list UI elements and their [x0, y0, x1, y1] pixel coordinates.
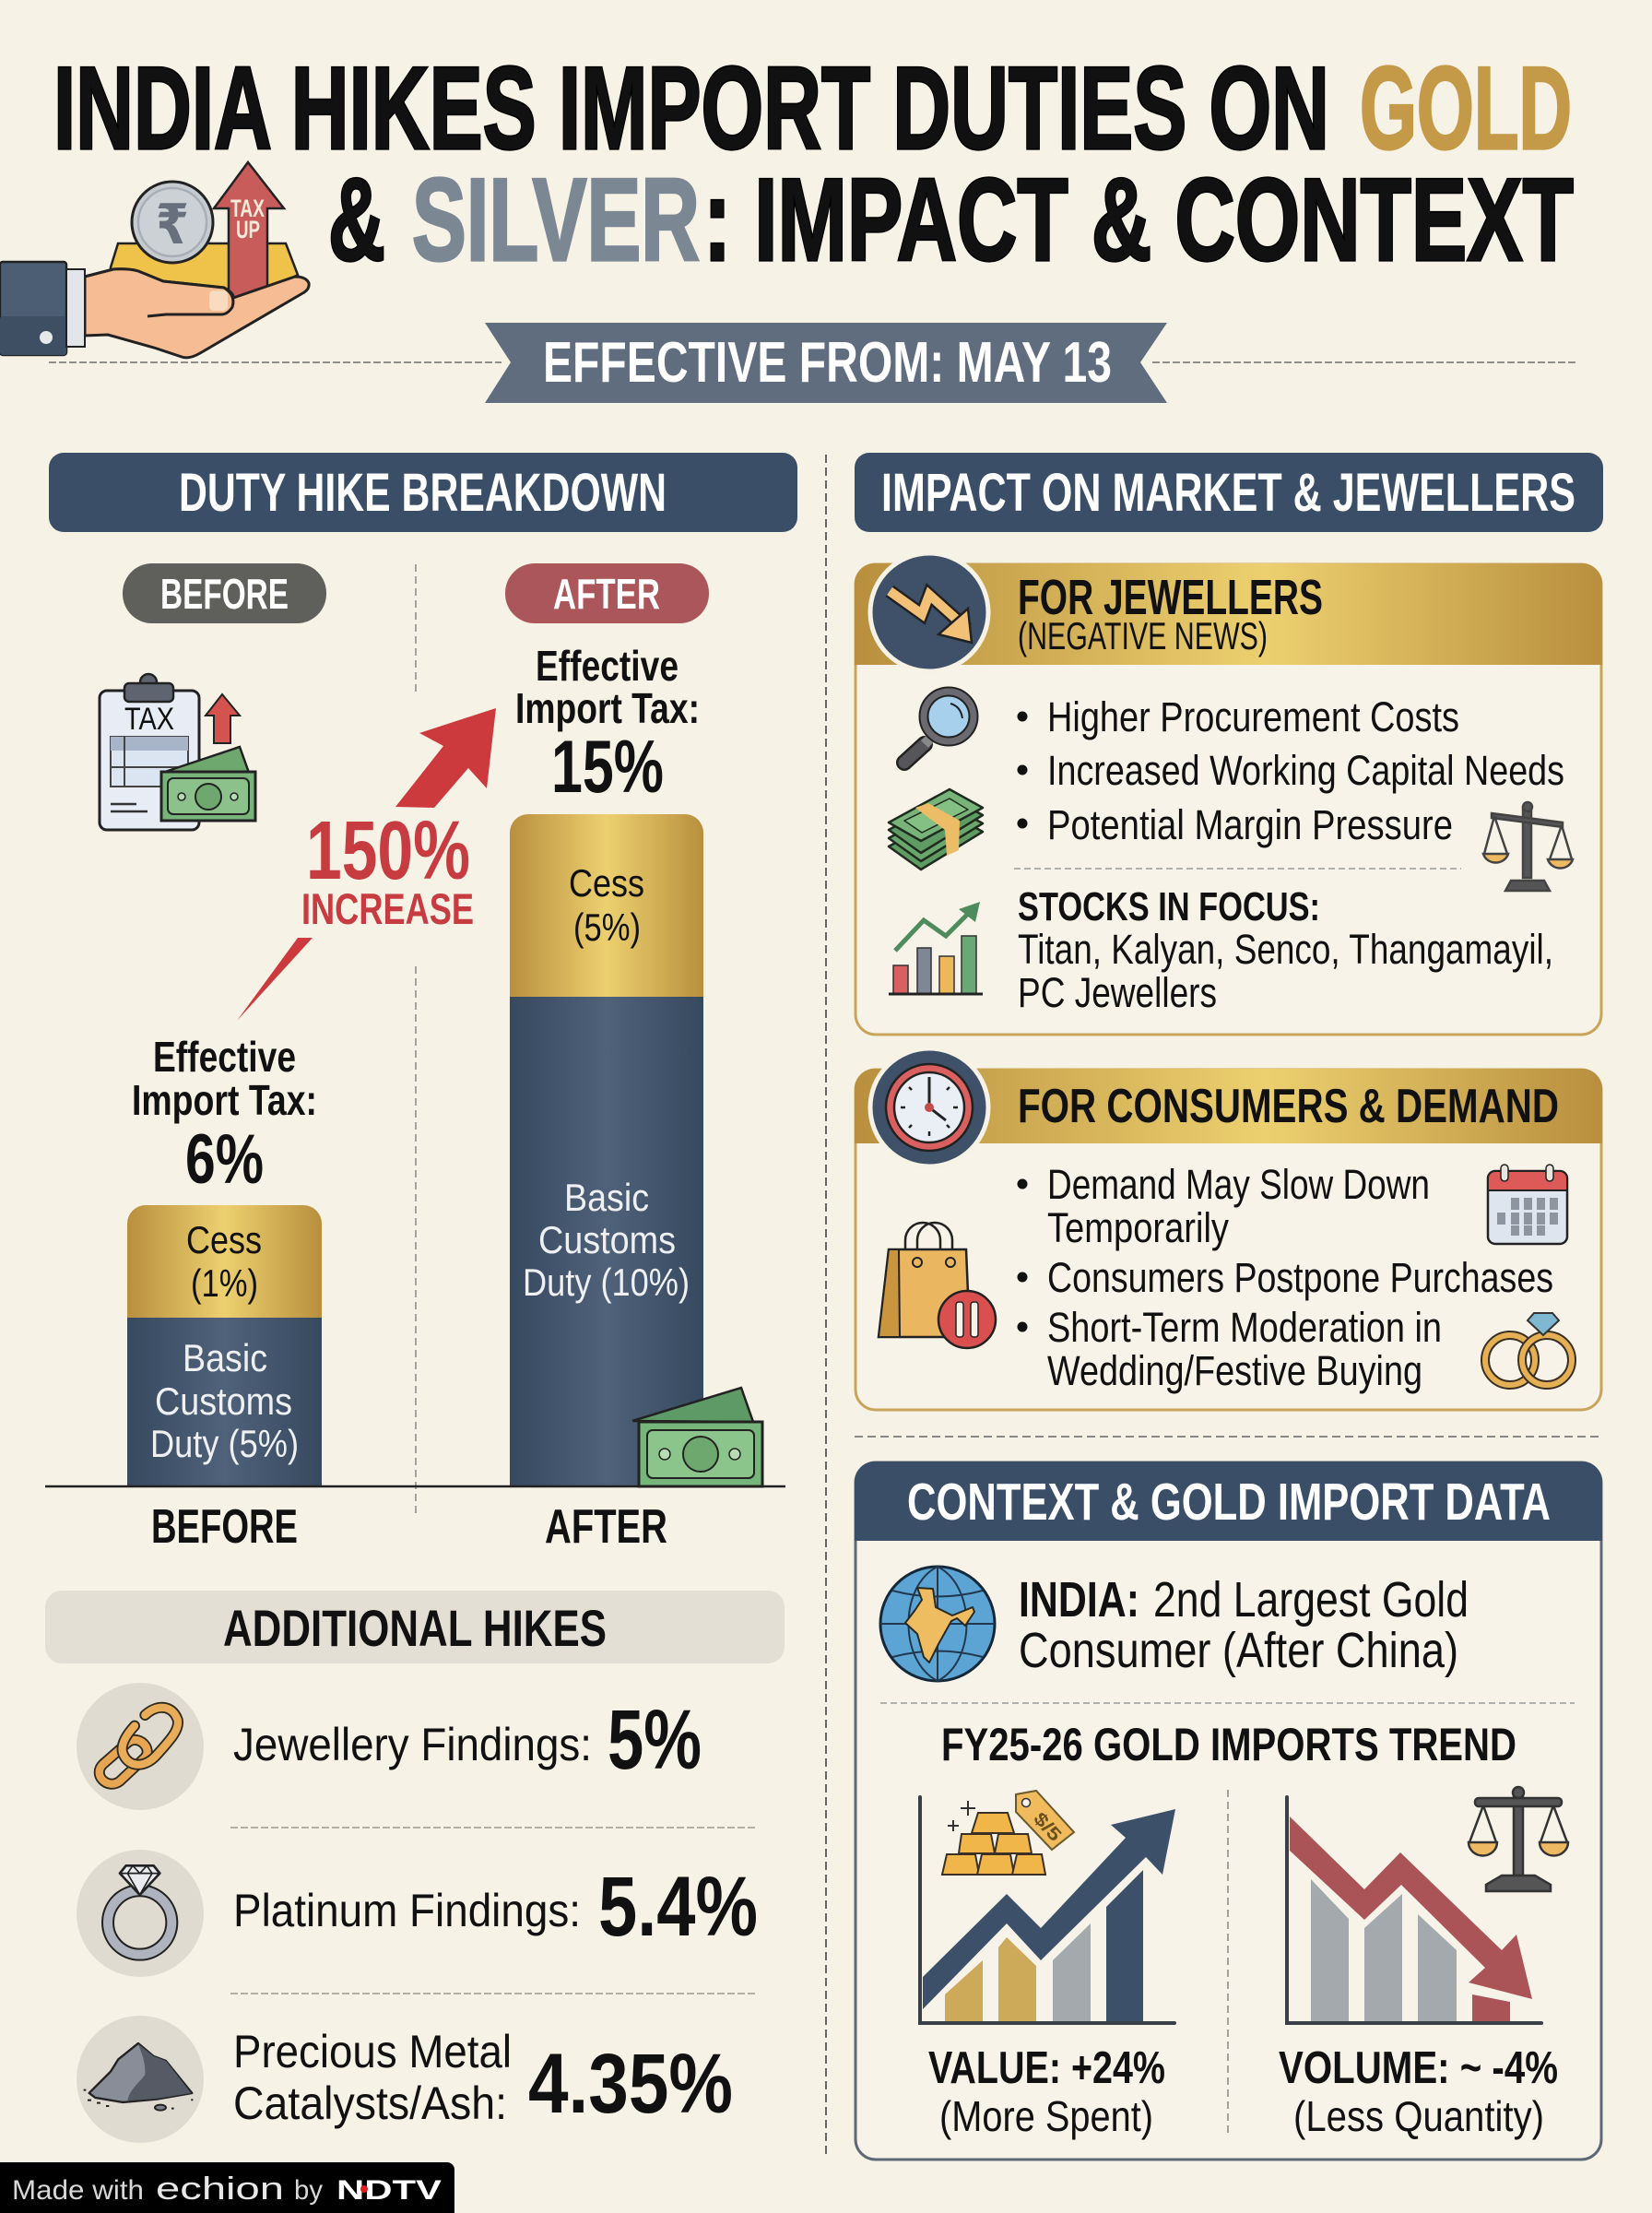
icon: wedding rings	[1485, 1313, 1572, 1385]
panel: duty hike breakdown	[45, 453, 797, 1554]
panel: context and gold import data	[855, 1462, 1602, 2160]
before effective tax label	[132, 1033, 317, 1199]
bar: before	[127, 1205, 322, 1486]
before effective tax label: Effective	[153, 1033, 296, 1081]
bar: after: (5%)	[573, 905, 641, 949]
panel: for jewellers: (NEGATIVE NEWS)	[1018, 614, 1268, 657]
bar: after: Customs	[538, 1218, 676, 1261]
title	[53, 42, 1574, 285]
bar: before: Basic	[183, 1336, 267, 1379]
jewellers bullet list: Higher Procurement Costs	[1047, 693, 1459, 740]
icon: hand holding gold, coin and tax arrow: TAX	[230, 195, 265, 222]
consumers bullet list: Consumers Postpone Purchases	[1047, 1254, 1553, 1301]
icon: shopping bag paused	[879, 1223, 996, 1348]
heading: impact on market	[855, 453, 1603, 532]
icon: tax form with cash: TAX	[124, 702, 174, 737]
icon: stock chart	[889, 902, 983, 994]
chart: value trend: (More Spent)	[939, 2092, 1153, 2140]
icon: cash at bar base	[632, 1388, 762, 1486]
panel: for consumers and demand	[855, 1048, 1602, 1410]
row: platinum findings: Platinum Findings:	[233, 1885, 581, 1936]
footer badge: by	[294, 2175, 323, 2206]
consumers bullet list	[1018, 1161, 1553, 1394]
bar: after: Duty (10%)	[523, 1260, 690, 1304]
india fact	[1019, 1572, 1469, 1678]
jewellers bullet list	[1018, 693, 1564, 848]
after effective tax label: Effective	[536, 642, 678, 690]
chart: value trend: VALUE: +24%	[928, 2043, 1165, 2093]
after effective tax label: Import Tax:	[515, 684, 700, 732]
icon: gold bars and tag	[942, 1791, 1074, 1875]
title: SILVER	[412, 154, 700, 285]
arrow: 150 percent increase: INCREASE	[301, 884, 474, 933]
jewellers bullet list: Increased Working Capital Needs	[1047, 747, 1564, 794]
row: platinum findings: 5.4%	[598, 1860, 758, 1954]
icon: hand holding gold, coin and tax arrow: ₹	[156, 193, 189, 257]
heading: duty hike breakdown: DUTY HIKE BREAKDOWN	[179, 463, 667, 523]
chart: volume trend	[1279, 1787, 1568, 2140]
stocks in focus: STOCKS IN FOCUS:	[1018, 884, 1320, 929]
row: jewellery findings: 5%	[608, 1693, 702, 1787]
after pill	[505, 563, 709, 623]
footer badge: Made with	[12, 2175, 144, 2206]
heading: additional hikes	[45, 1591, 785, 1663]
chart: value trend	[920, 1791, 1175, 2140]
heading: context	[855, 1462, 1602, 1541]
icon: hand holding gold, coin and tax arrow: UP	[236, 216, 260, 243]
footer badge: NDTV	[336, 2175, 442, 2206]
trend heading: FY25-26 GOLD IMPORTS TREND	[941, 1719, 1516, 1770]
row: platinum findings	[77, 1850, 758, 1977]
chart: volume trend: (Less Quantity)	[1293, 2092, 1544, 2140]
heading: duty hike breakdown	[49, 453, 797, 532]
bar: before: Duty (5%)	[150, 1422, 299, 1465]
jewellers bullet list: Potential Margin Pressure	[1047, 801, 1453, 848]
row: jewellery findings	[77, 1683, 702, 1810]
consumers bullet list: Temporarily	[1047, 1204, 1229, 1251]
arrow: 150 percent increase	[237, 708, 496, 1021]
bar: after: Cess	[569, 861, 644, 905]
chart: volume trend: VOLUME: ~ -4%	[1279, 2043, 1558, 2093]
icon: globe with India	[880, 1567, 995, 1681]
footer badge: echion	[156, 2172, 284, 2207]
india fact: 2nd Largest Gold	[1153, 1572, 1469, 1627]
before pill: BEFORE	[160, 570, 289, 618]
india fact: INDIA:	[1019, 1572, 1139, 1627]
center divider	[825, 455, 827, 2158]
effective date ribbon: EFFECTIVE FROM: MAY 13	[543, 331, 1112, 395]
footer badge	[0, 2162, 454, 2213]
bar: after: Basic	[564, 1176, 649, 1219]
bar: before: Customs	[155, 1379, 292, 1423]
stocks in focus	[1018, 884, 1553, 1016]
panel: for jewellers	[855, 553, 1602, 1035]
before effective tax label: 6%	[185, 1120, 264, 1199]
icon: clock badge	[870, 1048, 988, 1166]
icon: scales	[1483, 802, 1573, 891]
bar: after	[510, 814, 703, 1486]
after effective tax label	[515, 642, 700, 809]
row: precious metal catalysts: 4.35%	[528, 2037, 733, 2131]
icon: magnifier	[904, 692, 974, 763]
row: precious metal catalysts: Precious Metal	[233, 2026, 512, 2077]
axis label: before: BEFORE	[151, 1500, 298, 1554]
arrow: 150 percent increase: 150%	[306, 805, 470, 897]
row: precious metal catalysts	[77, 2016, 733, 2143]
bar: before: (1%)	[191, 1261, 258, 1305]
consumers bullet list: Wedding/Festive Buying	[1047, 1347, 1422, 1394]
icon: calendar	[1488, 1165, 1567, 1244]
row: precious metal catalysts: Catalysts/Ash:	[233, 2077, 507, 2129]
consumers bullet list: Short-Term Moderation in	[1047, 1304, 1442, 1351]
icon: balance scales	[1469, 1787, 1568, 1891]
title: &	[328, 154, 385, 285]
heading: additional hikes: ADDITIONAL HIKES	[223, 1599, 607, 1657]
icon: hand holding gold, coin and tax arrow	[0, 162, 309, 358]
icon: money stack	[889, 789, 983, 870]
after effective tax label: 15%	[551, 726, 664, 809]
row: jewellery findings: Jewellery Findings:	[233, 1719, 592, 1770]
icon: gold bars and tag: $/5	[1029, 1809, 1065, 1846]
panel: for jewellers: FOR JEWELLERS	[1018, 570, 1323, 625]
after pill: AFTER	[553, 570, 660, 618]
icon: tax form with cash	[100, 674, 255, 830]
stocks in focus: PC Jewellers	[1018, 969, 1217, 1016]
effective date ribbon	[49, 323, 1575, 403]
before effective tax label: Import Tax:	[132, 1076, 317, 1124]
bar: before: Cess	[186, 1218, 262, 1261]
stocks in focus: Titan, Kalyan, Senco, Thangamayil,	[1018, 926, 1553, 973]
panel: additional hikes	[45, 1591, 785, 2143]
consumers bullet list: Demand May Slow Down	[1047, 1161, 1430, 1208]
before pill	[123, 563, 326, 623]
axis label: after: AFTER	[545, 1500, 667, 1554]
india fact: Consumer (After China)	[1019, 1623, 1458, 1678]
icon: falling arrow badge	[870, 553, 988, 671]
